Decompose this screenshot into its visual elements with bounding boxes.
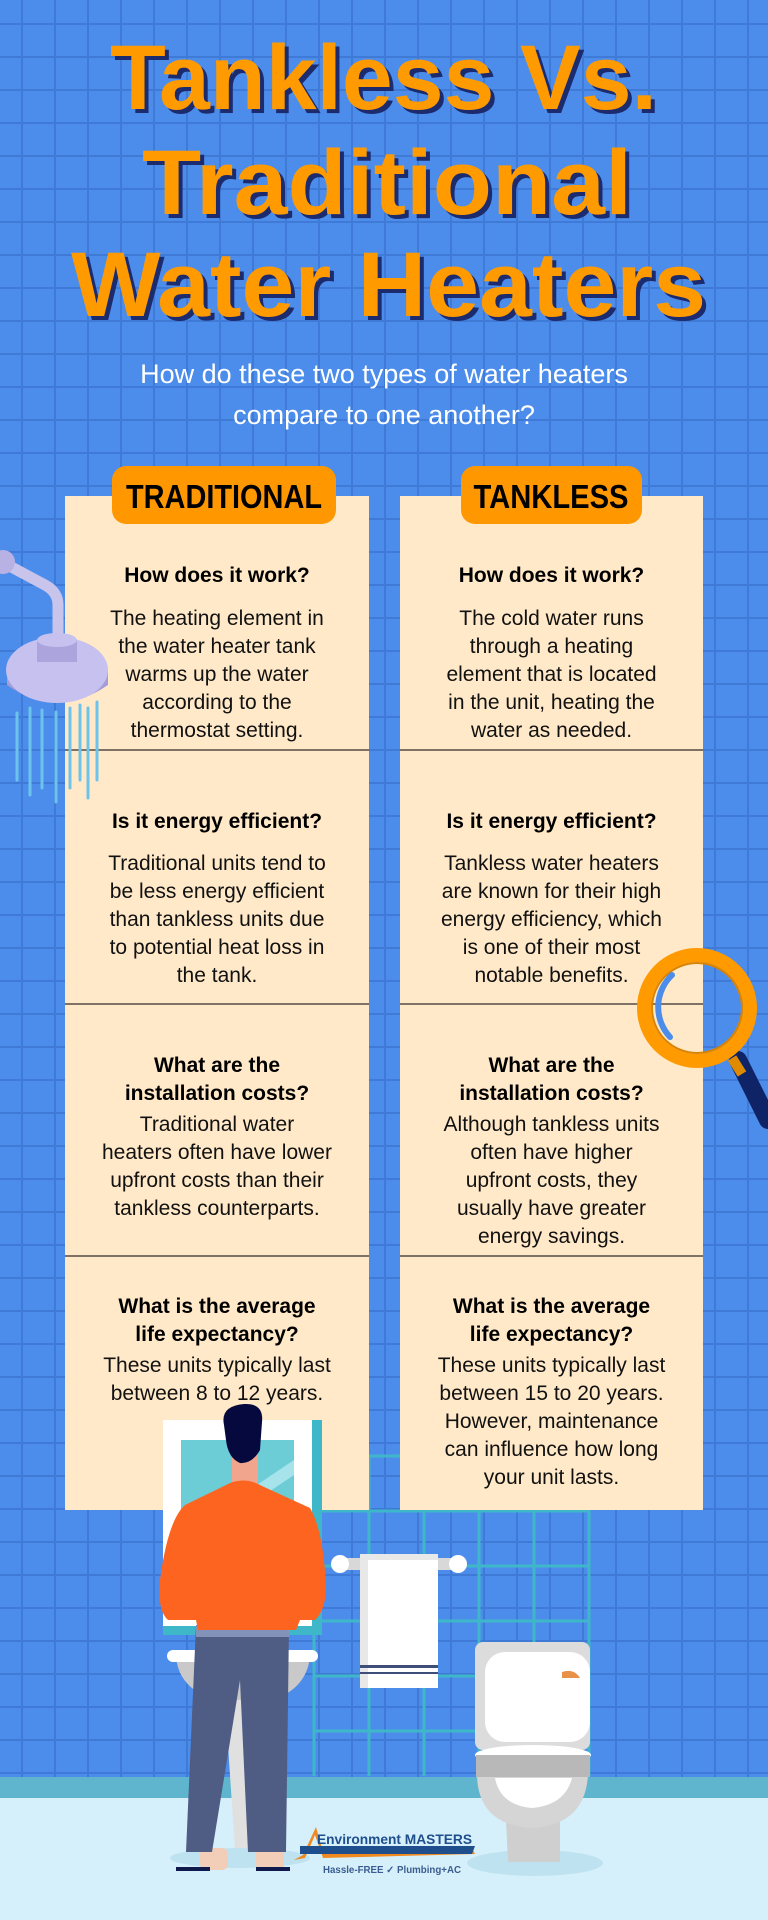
right body 1: element that is located <box>446 663 657 686</box>
header: tankless <box>461 466 642 524</box>
right body 1 <box>446 607 657 742</box>
title: Traditional <box>142 132 632 234</box>
right body 4: These units typically last <box>438 1354 665 1377</box>
title: Tankless Vs. <box>110 27 657 129</box>
left body 1: warms up the water <box>125 663 309 686</box>
right body 3: usually have greater <box>457 1197 646 1220</box>
towel <box>331 1554 467 1688</box>
title: Tankless Vs. <box>114 31 661 133</box>
scene: bathroom <box>0 1404 768 1920</box>
right body 4: However, maintenance <box>445 1410 658 1433</box>
left body 1 <box>110 607 324 742</box>
left body 3: Traditional water <box>140 1113 294 1136</box>
left body 2: Traditional units tend to <box>108 852 326 875</box>
right: costs: installation costs? <box>459 1082 644 1105</box>
right body 4: your unit lasts. <box>484 1466 619 1489</box>
left body 1: The heating element in <box>110 607 324 630</box>
floor <box>0 1798 768 1920</box>
left body 4: between 8 to 12 years. <box>111 1382 323 1405</box>
logo: Environment MASTERS <box>317 1831 472 1847</box>
left: how does it work: How does it work? <box>124 564 310 587</box>
subtitle: compare to one another? <box>233 400 535 430</box>
left: costs: installation costs? <box>125 1082 309 1105</box>
left body 2: to potential heat loss in <box>110 936 324 959</box>
icon: magnifying glass <box>637 948 768 1129</box>
right body 2 <box>441 852 662 987</box>
left body 4: These units typically last <box>103 1354 331 1377</box>
right body 2: notable benefits. <box>474 964 629 987</box>
right body 4: between 15 to 20 years. <box>439 1382 664 1405</box>
right: how does it work: How does it work? <box>459 564 644 587</box>
left: life: life expectancy? <box>135 1323 299 1346</box>
logo: Hassle-FREE ✓ Plumbing+AC <box>323 1865 461 1876</box>
header: traditional <box>112 466 336 524</box>
title <box>71 27 710 340</box>
right: costs <box>459 1054 644 1105</box>
mirror <box>163 1420 322 1635</box>
left body 3: tankless counterparts. <box>114 1197 320 1220</box>
right body 3: often have higher <box>470 1141 633 1164</box>
toilet <box>467 1642 603 1876</box>
right body 3 <box>444 1113 659 1248</box>
right: costs: What are the <box>488 1054 615 1077</box>
left body 1: thermostat setting. <box>131 719 303 742</box>
right: energy: Is it energy efficient? <box>446 810 657 833</box>
logo <box>294 1827 475 1876</box>
right body 1: in the unit, heating the <box>448 691 655 714</box>
panel: traditional <box>65 496 369 1510</box>
title: Traditional <box>146 136 636 238</box>
right body 2: are known for their high <box>442 880 661 903</box>
right body 2: is one of their most <box>463 936 640 959</box>
sink <box>167 1650 318 1868</box>
right body 2: energy efficiency, which <box>441 908 662 931</box>
right: life: life expectancy? <box>470 1323 633 1346</box>
subtitle: How do these two types of water heaters <box>140 359 628 389</box>
left: costs: What are the <box>154 1054 280 1077</box>
right body 4 <box>438 1354 666 1489</box>
left: energy: Is it energy efficient? <box>112 810 322 833</box>
right body 3: upfront costs, they <box>466 1169 637 1192</box>
left body 3: heaters often have lower <box>102 1141 332 1164</box>
right body 4: can influence how long <box>445 1438 658 1461</box>
title: Water Heaters <box>75 238 710 340</box>
right body 1: The cold water runs <box>459 607 644 630</box>
left body 1: the water heater tank <box>118 635 316 658</box>
right body 3: energy savings. <box>478 1225 625 1248</box>
left body 2: than tankless units due <box>110 908 324 931</box>
left body 3 <box>102 1113 332 1220</box>
left body 2: the tank. <box>177 964 257 987</box>
right: life: What is the average <box>453 1295 650 1318</box>
left body 4 <box>103 1354 331 1405</box>
right body 2: Tankless water heaters <box>444 852 659 875</box>
left body 3: upfront costs than their <box>110 1169 324 1192</box>
right body 3: Although tankless units <box>444 1113 659 1136</box>
left body 2: be less energy efficient <box>110 880 324 903</box>
left: life: What is the average <box>118 1295 316 1318</box>
right body 1: through a heating <box>470 635 633 658</box>
panel: tankless <box>400 496 703 1510</box>
right: life <box>452 1295 650 1346</box>
left body 2 <box>108 852 326 987</box>
left: life <box>118 1295 316 1346</box>
title: Water Heaters <box>71 234 706 336</box>
left: costs <box>125 1054 309 1105</box>
man <box>159 1404 326 1871</box>
icon: shower head <box>0 550 108 804</box>
left body 1: according to the <box>142 691 292 714</box>
subtitle <box>140 359 628 430</box>
baseboard <box>0 1777 768 1798</box>
right body 1: water as needed. <box>471 719 632 742</box>
